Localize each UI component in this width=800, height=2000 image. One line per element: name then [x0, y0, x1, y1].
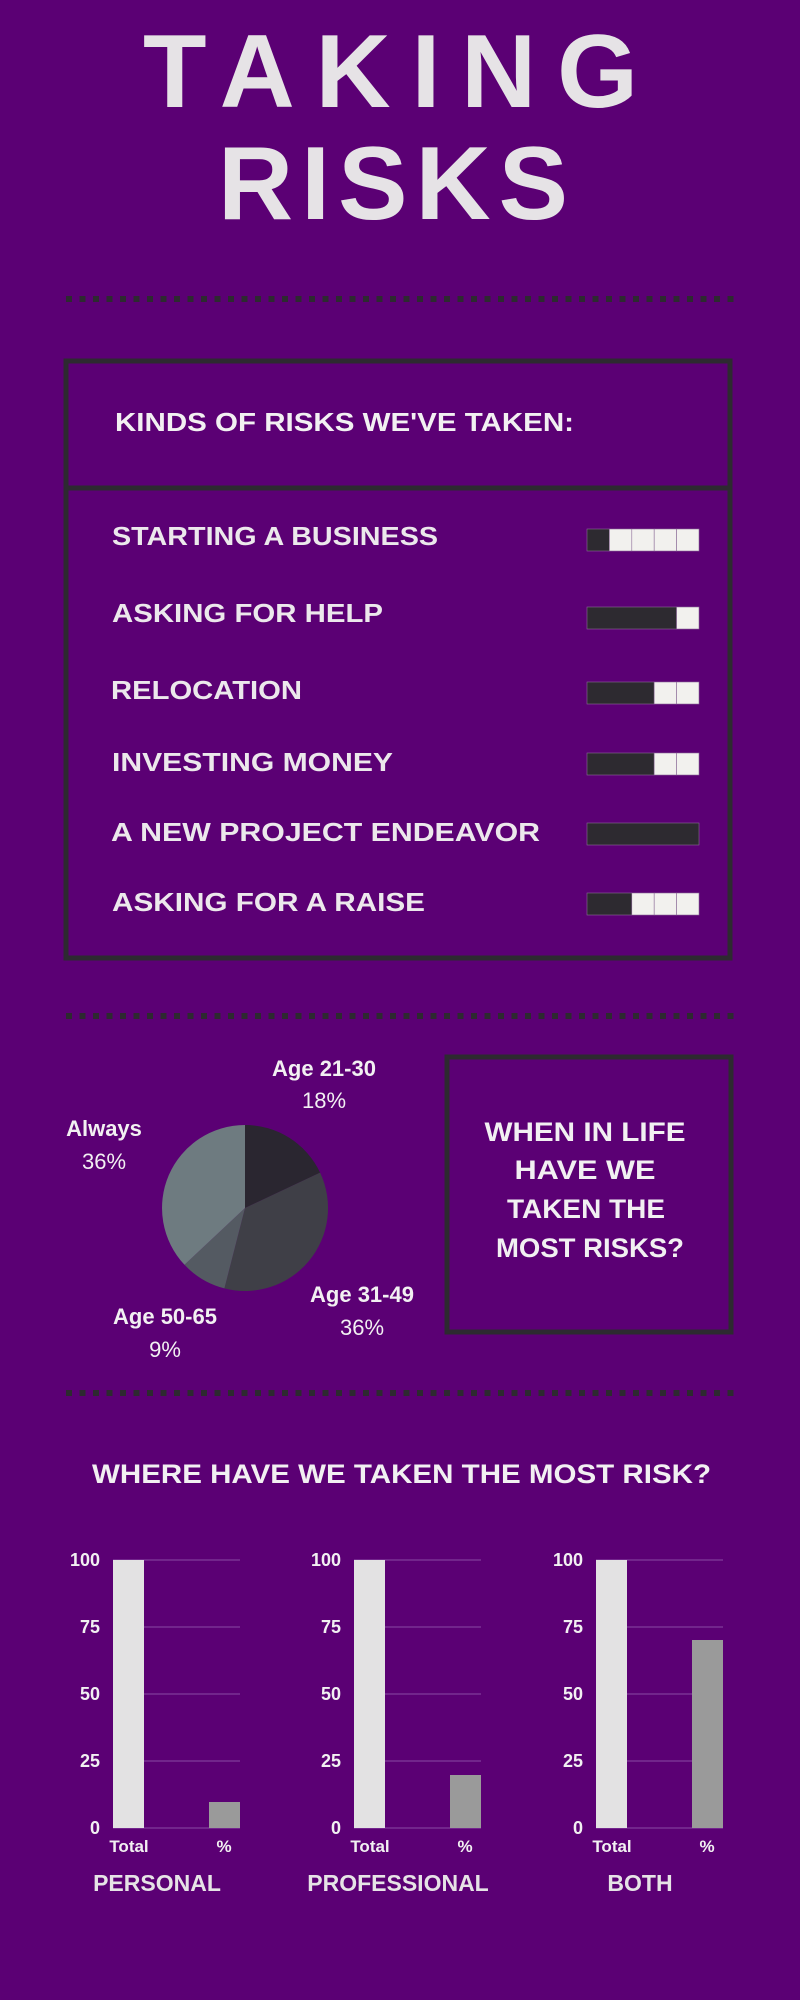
pie labels: 36%	[340, 1315, 384, 1340]
panel: question box: MOST RISKS?	[496, 1233, 684, 1263]
bar chart: professional: 50	[321, 1684, 341, 1704]
rating bars	[587, 529, 699, 915]
list items: A NEW PROJECT ENDEAVOR	[111, 817, 540, 847]
list items: RELOCATION	[111, 675, 302, 705]
panel: question box	[447, 1057, 731, 1332]
bar chart: both: 50	[563, 1684, 583, 1704]
bar chart: professional: Total	[350, 1837, 390, 1856]
bar chart: both: %	[699, 1837, 715, 1856]
bar chart: personal: Total	[109, 1837, 149, 1856]
bar chart: professional: 100	[311, 1550, 341, 1570]
bar chart: personal: PERSONAL	[93, 1870, 221, 1896]
bar chart: professional: PROFESSIONAL	[307, 1870, 489, 1896]
pie labels: 18%	[302, 1088, 346, 1113]
pie labels	[66, 1056, 414, 1362]
bar chart: both: Total	[592, 1837, 632, 1856]
pie labels: Age 21-30	[272, 1056, 376, 1081]
list items: STARTING A BUSINESS	[112, 521, 438, 551]
bar chart: professional: 75	[321, 1617, 341, 1637]
bar chart: both: 100	[553, 1550, 583, 1570]
bar chart: personal: 100	[70, 1550, 100, 1570]
bar chart: personal	[70, 1550, 240, 1896]
list items	[111, 521, 540, 917]
pie labels: Age 31-49	[310, 1282, 414, 1307]
list items: INVESTING MONEY	[112, 747, 393, 777]
panel: question box: HAVE WE	[514, 1155, 656, 1185]
bar chart: personal: 25	[80, 1751, 100, 1771]
pie labels: 9%	[149, 1337, 181, 1362]
panel: kinds of risks	[66, 361, 730, 958]
bar chart: both	[553, 1550, 723, 1896]
bar chart: professional	[307, 1550, 489, 1896]
title: RISKS	[218, 126, 568, 242]
bar chart: both: 25	[563, 1751, 583, 1771]
list items: ASKING FOR A RAISE	[112, 887, 425, 917]
pie chart	[162, 1125, 328, 1291]
bar chart: professional: %	[457, 1837, 473, 1856]
bar chart: personal: 0	[90, 1818, 100, 1838]
bar chart: professional: 25	[321, 1751, 341, 1771]
pie labels: Always	[66, 1116, 142, 1141]
bar chart: personal: 50	[80, 1684, 100, 1704]
bar chart: both: BOTH	[607, 1870, 673, 1896]
title	[143, 14, 638, 242]
pie labels: 36%	[82, 1149, 126, 1174]
bar chart: personal: 75	[80, 1617, 100, 1637]
title: TAKING	[143, 14, 638, 130]
panel: question box: WHEN IN LIFE	[484, 1117, 686, 1147]
pie labels: Age 50-65	[113, 1304, 217, 1329]
bar chart: both: 75	[563, 1617, 583, 1637]
bar chart: personal: %	[216, 1837, 232, 1856]
list items: ASKING FOR HELP	[112, 598, 383, 628]
bar chart: professional: 0	[331, 1818, 341, 1838]
bar chart: both: 0	[573, 1818, 583, 1838]
heading: kinds of risks: KINDS OF RISKS WE'VE TAKEN:	[115, 407, 574, 437]
panel: question box: TAKEN THE	[507, 1194, 665, 1224]
heading: where: WHERE HAVE WE TAKEN THE MOST RISK?	[92, 1459, 711, 1489]
